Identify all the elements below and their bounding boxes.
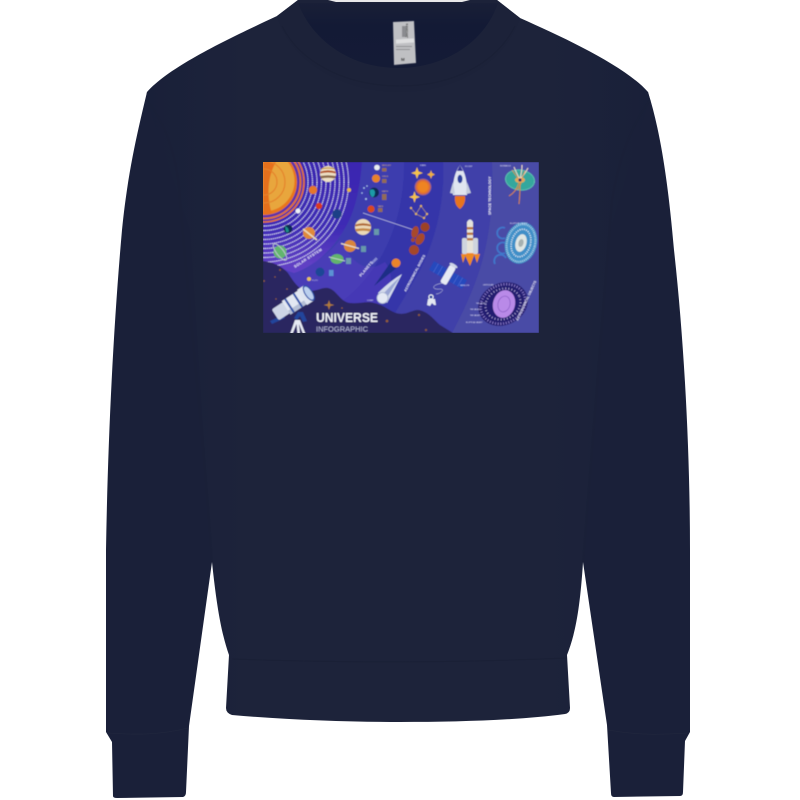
- heading: planets: PLANETS: [359, 260, 374, 278]
- Venus dot: [347, 188, 351, 192]
- heading: space technology: SPACE TECHNOLOGY: [488, 176, 492, 215]
- icon: shuttle rocket: [450, 165, 471, 209]
- astronomical objects: [466, 165, 542, 334]
- planet captions: MERCURY: [382, 165, 392, 167]
- planet captions: MARS: [378, 205, 384, 208]
- artwork layer: [263, 162, 539, 333]
- galaxy captions: THE GALAXY: [476, 302, 487, 305]
- Uranus: [272, 242, 288, 262]
- torso: [146, 0, 650, 722]
- tether: [434, 283, 443, 294]
- galaxy captions: LENTICULAR: [483, 284, 494, 286]
- heading: astronomical bodies: ASTRONOMICAL BODIES: [403, 253, 427, 292]
- panel: astronomical bodies band: [344, 162, 442, 312]
- Saturn: [341, 240, 359, 252]
- mount: [294, 312, 307, 322]
- planet caption blocks: [378, 168, 386, 212]
- Saturn: [303, 227, 317, 240]
- astronomical bodies: [367, 164, 435, 304]
- Jupiter: [355, 219, 371, 235]
- Venus: [372, 174, 380, 182]
- asteroid: [420, 222, 430, 232]
- outer planet caption blocks: [346, 229, 379, 264]
- constellation: [410, 205, 428, 219]
- icon: planets mini bars: [372, 258, 377, 263]
- planet captions: [378, 165, 392, 208]
- red planet: [316, 203, 322, 209]
- Neptune caption block: [329, 270, 334, 276]
- sweatshirt: [106, 0, 690, 798]
- right sleeve seam shading: [583, 100, 650, 562]
- moons around Earth: [361, 185, 368, 200]
- title: UNIVERSE: [316, 311, 378, 325]
- left sleeve seam shading: [147, 100, 212, 562]
- Neptune: [316, 268, 324, 276]
- asteroid: [413, 232, 427, 246]
- white planet: [296, 208, 300, 214]
- icon: spiral galaxy: [500, 219, 542, 267]
- counterweight: [270, 315, 285, 324]
- Pluto caption: PLUTO: [312, 280, 319, 282]
- satellite caption: SATELLITE: [460, 284, 470, 287]
- Jupiter: [320, 166, 336, 182]
- Pluto: [307, 277, 311, 281]
- subtitle: INFOGRAPHIC: [316, 324, 368, 334]
- Neptune: [332, 209, 342, 219]
- stars on navy: [263, 269, 427, 331]
- right sleeve: [565, 92, 690, 797]
- icon: star large: [411, 167, 423, 179]
- chart: semicircle gauges: [494, 228, 506, 264]
- wormhole caption: WORMHOLE: [500, 166, 512, 168]
- panel: space technology band: [396, 162, 492, 332]
- white highlight at neck top: [328, 0, 470, 2]
- tube: [270, 283, 317, 322]
- asteroid small: [411, 238, 415, 242]
- neck opening: [298, 3, 498, 68]
- icon: star small: [427, 170, 435, 179]
- Earth: [369, 188, 379, 198]
- icon: irregular galaxy: [471, 274, 535, 334]
- hem rib seam: [232, 658, 567, 662]
- icon: telescope: [270, 283, 317, 334]
- galaxy captions: ELLIPTICAL GALAXY: [466, 321, 483, 324]
- panel: solar system band: [263, 162, 362, 273]
- heading: solar system: SOLAR SYSTEM: [293, 248, 323, 269]
- spiral galaxy caption: ELLIPTICAL GALAXY: [510, 222, 528, 225]
- panel: astronomical objects band: [452, 162, 539, 333]
- comet caption: COMET: [367, 300, 374, 302]
- Mars orange: [309, 186, 317, 194]
- galaxy captions: [466, 284, 494, 324]
- connector lines: [363, 213, 414, 230]
- rocket caption: ROCKET: [465, 166, 473, 168]
- satellite: [427, 255, 471, 293]
- Earth: [284, 225, 292, 233]
- galaxy captions: THE GALAXY: [470, 314, 481, 317]
- panel: planets band: [340, 162, 404, 261]
- icon: comet: [377, 274, 402, 304]
- planets list: [307, 165, 392, 282]
- collar rib: [277, 0, 520, 92]
- right cuff seam: [608, 730, 687, 734]
- galaxy captions: THE GALAXY: [470, 308, 481, 311]
- icon: multistage rocket: [461, 220, 480, 266]
- star caption: STARS: [420, 164, 427, 167]
- Mercury: [374, 165, 380, 170]
- asteroid: [409, 245, 419, 255]
- left sleeve: [106, 92, 232, 798]
- tripod: [290, 320, 306, 334]
- icon: sun: [263, 162, 306, 224]
- icon: astronaut: [427, 294, 436, 306]
- lower purple glow: [288, 241, 391, 304]
- icon: wormhole: [504, 165, 536, 204]
- neck label: M: [401, 57, 405, 62]
- icon: meteor: [374, 258, 400, 286]
- heading: astronomical objects: ASTRONOMICAL OBJECTS: [515, 279, 538, 321]
- icon: star medium: [409, 191, 420, 203]
- solar system planets: [271, 166, 351, 262]
- Mars: [368, 206, 374, 212]
- chart: orbits: [263, 162, 350, 266]
- space technology: [427, 165, 480, 306]
- left cuff seam: [108, 728, 188, 734]
- planet captions: EARTH: [382, 190, 389, 193]
- neck label: [393, 21, 416, 65]
- collar seam: [282, 26, 515, 86]
- panel: dark navy foreground: [263, 261, 453, 333]
- icon: star burst: [324, 300, 334, 310]
- Uranus: [329, 254, 345, 264]
- printed infographic: [263, 162, 539, 333]
- icon: glowing sun: [414, 178, 432, 196]
- planet captions: VENUS: [382, 176, 389, 178]
- neck label: Jerzees: [404, 23, 409, 38]
- asteroid: [410, 225, 420, 239]
